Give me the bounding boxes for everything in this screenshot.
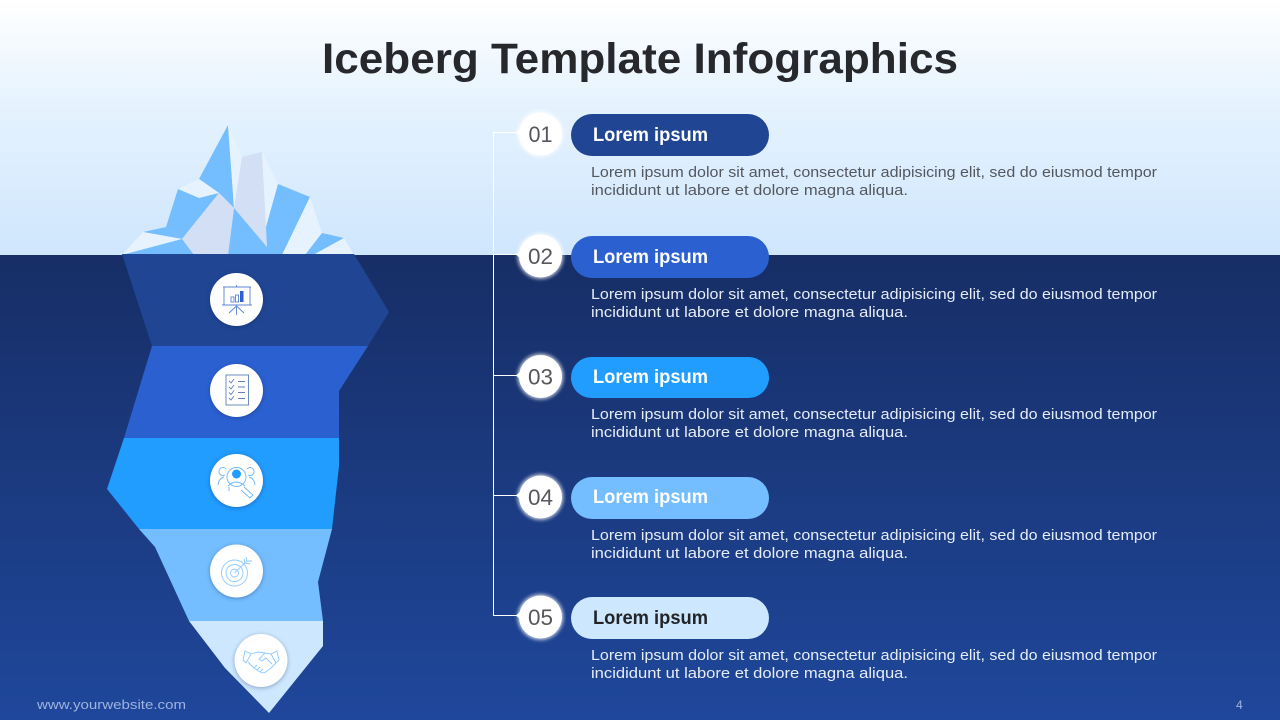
number badge 04: 04	[528, 485, 553, 510]
item 01	[516, 111, 1157, 199]
number badge 04	[516, 474, 564, 520]
pill 03	[571, 357, 769, 398]
number badge 05: 05	[528, 605, 553, 630]
item 04	[516, 474, 1157, 562]
number badge 02: 02	[528, 244, 553, 269]
footer website: www.yourwebsite.com	[36, 697, 186, 712]
description 03: incididunt ut labore et dolore magna aliqua.	[591, 424, 908, 441]
number badge 03: 03	[528, 364, 553, 390]
number badge 01	[516, 111, 564, 157]
title: Iceberg Template Infographics	[322, 35, 958, 83]
pill 02	[571, 236, 769, 278]
pill 04: Lorem ipsum	[593, 487, 708, 508]
iceberg tip	[122, 125, 354, 255]
number badge 05	[516, 594, 564, 640]
icon: target	[210, 544, 263, 598]
item 02	[516, 233, 1157, 321]
iceberg band 1	[122, 254, 389, 346]
icon: checklist	[210, 364, 263, 417]
page number: 4	[1236, 698, 1243, 712]
description 02	[591, 286, 1157, 321]
pill 05	[571, 597, 769, 639]
iceberg band 3	[107, 438, 339, 529]
icon: presentation chart	[210, 273, 263, 326]
item 03	[516, 354, 1157, 441]
description 03: Lorem ipsum dolor sit amet, consectetur adipisicing elit, sed do eiusmod tempor	[591, 406, 1157, 423]
number badge 01: 01	[528, 122, 552, 147]
description 02: Lorem ipsum dolor sit amet, consectetur adipisicing elit, sed do eiusmod tempor	[591, 286, 1157, 303]
number badge 02	[516, 233, 564, 279]
pill 05: Lorem ipsum	[593, 608, 708, 629]
description 04	[591, 527, 1157, 562]
background: sea	[0, 255, 1280, 720]
iceberg band 5	[189, 621, 323, 713]
description 01: incididunt ut labore et dolore magna aliqua.	[591, 182, 908, 199]
description 05: incididunt ut labore et dolore magna aliqua.	[591, 665, 908, 682]
description 04: incididunt ut labore et dolore magna aliqua.	[591, 545, 908, 562]
pill 04	[571, 477, 769, 519]
description 01	[591, 164, 1157, 199]
connector lines	[494, 132, 519, 616]
background: sky	[0, 0, 1280, 255]
iceberg band 2	[124, 346, 368, 438]
iceberg band 4	[139, 529, 332, 621]
pill 01	[571, 114, 769, 156]
number badge 03	[516, 354, 564, 400]
item 05	[516, 594, 1157, 682]
pill 02: Lorem ipsum	[593, 247, 708, 268]
description 03	[591, 406, 1157, 441]
icon: people search	[210, 454, 263, 507]
description 05	[591, 647, 1157, 682]
description 04: Lorem ipsum dolor sit amet, consectetur adipisicing elit, sed do eiusmod tempor	[591, 527, 1157, 544]
description 05: Lorem ipsum dolor sit amet, consectetur adipisicing elit, sed do eiusmod tempor	[591, 647, 1157, 664]
pill 01: Lorem ipsum	[593, 125, 708, 146]
pill 03: Lorem ipsum	[593, 367, 708, 388]
icon: handshake	[234, 634, 288, 687]
description 01: Lorem ipsum dolor sit amet, consectetur adipisicing elit, sed do eiusmod tempor	[591, 164, 1157, 181]
description 02: incididunt ut labore et dolore magna aliqua.	[591, 304, 908, 321]
